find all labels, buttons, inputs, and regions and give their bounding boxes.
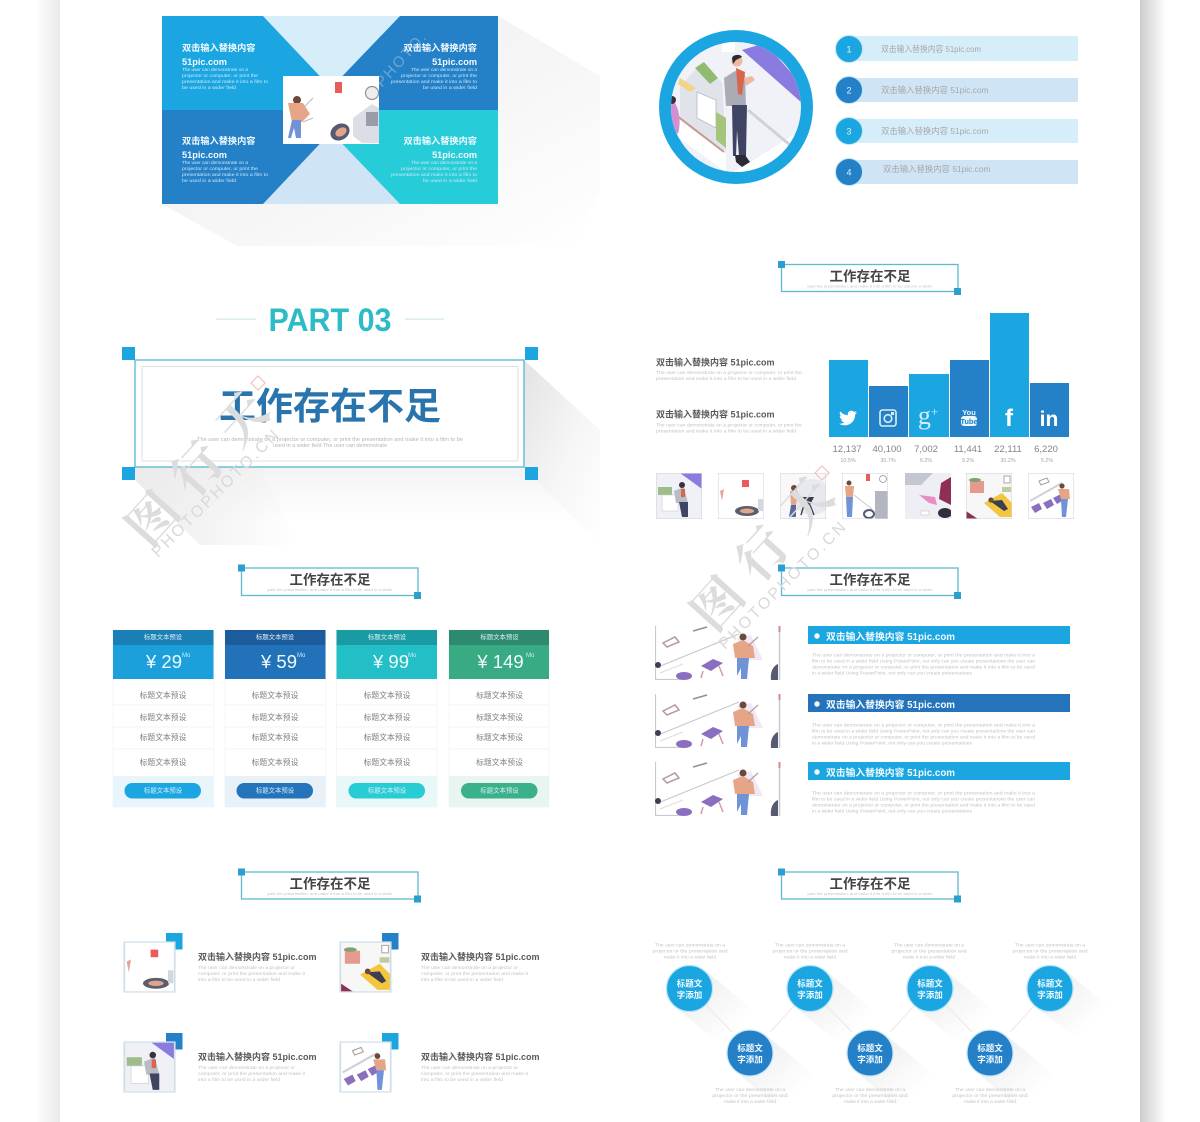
item 2: computer, or print the presentation and make it xyxy=(421,971,529,976)
row 1: demonstrate on a projector or computer, or print the presentation and make it into a film to be used xyxy=(812,664,1035,670)
bar: google plus xyxy=(909,374,949,437)
pricing card 3: 标题文本预设 xyxy=(364,712,411,722)
subtitle xyxy=(197,437,463,449)
main title: 工作存在不足 xyxy=(219,386,441,427)
list row 4: 双击输入替换内容 51pic.com xyxy=(883,164,991,174)
pricing card 1 xyxy=(113,630,214,807)
row 2: 双击输入替换内容 51pic.com xyxy=(826,698,955,711)
text: top left xyxy=(182,42,269,90)
node 5: projector or the presentation and xyxy=(712,1093,788,1098)
node 3: make it into a wider field xyxy=(903,954,955,960)
watermark: left xyxy=(116,376,284,561)
pricing card 3 xyxy=(336,630,437,807)
list row 1: 1 xyxy=(846,44,852,54)
text: top right: presentation and make it into a film to xyxy=(391,79,478,84)
pricing card 4: Mo xyxy=(526,653,535,659)
node 3: 标题文 xyxy=(917,978,943,988)
item 2: into a film to be used in a wider field xyxy=(421,977,503,982)
bar: google plus: + xyxy=(931,404,938,419)
node 4: 字添加 xyxy=(1037,990,1063,1000)
list row 2: 2 xyxy=(846,86,852,96)
list row 1: 双击输入替换内容 51pic.com xyxy=(881,44,981,54)
node 6: projector or the presentation and xyxy=(832,1093,908,1098)
row 2: film to be used in a wider field Using PowerPoint, not only can you create presentations the user can xyxy=(812,728,1035,734)
watermark: right: 图 xyxy=(681,567,756,641)
watermark: right: PHOTOPHOTO.CN xyxy=(716,517,851,653)
item 3: The user can demonstrate on a projector or xyxy=(198,1065,296,1070)
node 1: make it into a wider field xyxy=(664,954,716,960)
watermark: faint on top panel: PHOTO. xyxy=(372,28,431,91)
list row 3: 3 xyxy=(846,126,852,136)
bar: twitter xyxy=(829,360,868,437)
pricing card 3: 标题文本预设 xyxy=(368,632,407,641)
connector lines xyxy=(706,1005,1034,1032)
node 3 xyxy=(892,942,967,1012)
text block 2: The user can demonstrate on a projector or computer, or print the xyxy=(656,422,802,428)
item 2: The user can demonstrate on a projector or xyxy=(421,965,519,970)
PART 03 label: PART 03 xyxy=(268,302,392,338)
watermark: left: 图 xyxy=(116,482,191,556)
node 1: The user can demonstrate on a xyxy=(655,942,725,948)
node 1: 标题文 xyxy=(677,978,703,988)
item 1: into a film to be used in a wider field xyxy=(198,977,280,982)
text: bottom left: presentation and make it into a film to xyxy=(182,172,269,177)
panel: four colour quadrants xyxy=(162,16,600,246)
watermark: left: PHOTOPHOTO.CN xyxy=(149,425,284,561)
node 4: The user can demonstrate on a xyxy=(1015,942,1085,948)
chart values: 22,111 xyxy=(994,444,1022,455)
node 2 xyxy=(772,942,848,1012)
item 4: 双击输入替换内容 51pic.com xyxy=(421,1051,540,1062)
text: bottom left: 51pic.com xyxy=(182,150,227,160)
pricing card 4 xyxy=(449,630,549,807)
row 1: in a wider field Using PowerPoint, not only can you create presentations xyxy=(812,670,973,676)
node 6: The user can demonstrate on a xyxy=(835,1087,905,1092)
pricing card 3: 标题文本预设 xyxy=(364,757,411,767)
node 3: The user can demonstrate on a xyxy=(894,942,964,948)
row 3: 双击输入替换内容 51pic.com xyxy=(826,766,955,779)
node 4: projector or the presentation and xyxy=(1012,948,1088,954)
bar: facebook xyxy=(990,313,1029,437)
row 3: demonstrate on a projector or computer, or print the presentation and make it into a film to be used xyxy=(812,802,1035,808)
subtitle: The user can demonstrate on a projector or computer, or print the presentation and make it into a film to be xyxy=(197,437,463,443)
pricing card 2: 标题文本预设 xyxy=(252,757,299,767)
text block 1: 双击输入替换内容 51pic.com xyxy=(656,356,775,368)
watermark: right xyxy=(681,466,851,653)
text: bottom left xyxy=(182,135,269,183)
item 3: computer, or print the presentation and make it xyxy=(198,1071,306,1076)
heading frame: pricing section: past the presentation, and make it into a film to be used in a wider xyxy=(268,588,393,592)
watermark: left: 行 xyxy=(160,432,235,507)
row 2: in a wider field Using PowerPoint, not only can you create presentations xyxy=(812,740,973,746)
pricing card 4: 标题文本预设 xyxy=(480,786,519,794)
heading frame: bar chart section xyxy=(778,261,961,295)
heading frame: pricing section: 工作存在不足 xyxy=(290,572,371,588)
chart values: 7,002 xyxy=(914,444,938,455)
pricing card 2: 标题文本预设 xyxy=(252,690,299,700)
node 7: The user can demonstrate on a xyxy=(955,1087,1025,1092)
text: top right: projector or computer, or print the xyxy=(401,73,478,78)
row 1: The user can demonstrate on a projector or computer, or print the presentation and make it into a xyxy=(812,652,1035,658)
item 1 xyxy=(124,933,317,992)
node 1: projector or the presentation and xyxy=(652,948,728,954)
node 4 xyxy=(1012,942,1088,1012)
node 7: make it into a wider field xyxy=(964,1099,1016,1104)
heading frame: timeline section: 工作存在不足 xyxy=(830,876,911,892)
node 5: 字添加 xyxy=(737,1054,763,1064)
panel: three illustrated rows xyxy=(655,626,1070,816)
item 3 xyxy=(124,1033,317,1092)
pricing card 2: Mo xyxy=(297,653,306,659)
node 5 xyxy=(712,1030,788,1104)
node 1: 字添加 xyxy=(677,990,702,1000)
node 6: 标题文 xyxy=(857,1043,883,1053)
pricing card 4: 标题文本预设 xyxy=(480,632,519,641)
text: top left: 51pic.com xyxy=(182,57,227,67)
pricing card 2: 标题文本预设 xyxy=(256,632,295,641)
row 1 xyxy=(655,626,1070,680)
illustration: man in circle xyxy=(659,30,813,184)
long shadow xyxy=(162,16,600,246)
node 4: make it into a wider field xyxy=(1024,954,1076,960)
pricing card 4: ¥ 149 xyxy=(476,651,524,672)
pricing card 3: Mo xyxy=(408,653,417,659)
chart values: 5.2% xyxy=(1041,458,1053,464)
row 1: 双击输入替换内容 51pic.com xyxy=(826,630,955,643)
chart values: 30.2% xyxy=(1000,458,1016,464)
bar: youtube xyxy=(950,360,989,437)
node 6 xyxy=(832,1030,908,1104)
text: bottom left: be used in a wider field xyxy=(182,178,237,183)
item 4: The user can demonstrate on a projector or xyxy=(421,1065,519,1070)
text: bottom left: The user can demonstrate on a xyxy=(182,160,249,165)
text block 1 xyxy=(656,356,802,381)
pricing card 2: 标题文本预设 xyxy=(252,732,299,742)
item 1: 双击输入替换内容 51pic.com xyxy=(198,951,317,962)
node 5: make it into a wider field xyxy=(724,1099,776,1104)
illustration: centre photo xyxy=(283,76,379,144)
node 6: 字添加 xyxy=(857,1054,883,1064)
chart values: 9.2% xyxy=(962,458,974,464)
heading frame: timeline section xyxy=(778,868,961,902)
panel: image grid with captions xyxy=(124,933,540,1092)
heading frame: meeting rows section: 工作存在不足 xyxy=(830,572,911,588)
list row 2: 双击输入替换内容 51pic.com xyxy=(881,85,989,95)
text block 2: presentation and make it into a film to be used in a wider field xyxy=(656,428,796,434)
subtitle: used in a wider field The user can demonstrate xyxy=(273,443,387,449)
chart values: 6,220 xyxy=(1034,444,1058,455)
bar: youtube: You xyxy=(962,408,976,417)
pricing card 2: ¥ 59 xyxy=(260,651,297,672)
node 5: The user can demonstrate on a xyxy=(715,1087,785,1092)
pricing card 2 xyxy=(225,630,326,807)
pricing card 3: 标题文本预设 xyxy=(364,732,411,742)
node 4: 标题文 xyxy=(1037,978,1063,988)
text: top left: presentation and make it into a film to xyxy=(182,79,269,84)
pricing card 4: 标题文本预设 xyxy=(476,712,523,722)
node 1 xyxy=(652,942,728,1012)
pricing card 4: 标题文本预设 xyxy=(476,732,523,742)
chart values: 6.2% xyxy=(920,458,932,464)
pricing card 1: Mo xyxy=(182,653,191,659)
node 3: projector or the presentation and xyxy=(892,948,967,954)
chart values: 12,137 xyxy=(832,444,862,455)
chart values xyxy=(832,444,1058,464)
list row 2 xyxy=(836,76,1078,104)
text: bottom right: projector or computer, or print the xyxy=(401,166,478,171)
pricing card 1: ¥ 29 xyxy=(145,651,182,672)
list row 4 xyxy=(836,158,1078,186)
node 2: projector or the presentation and xyxy=(772,948,848,954)
text: bottom right xyxy=(391,135,478,183)
node 2: 字添加 xyxy=(797,990,823,1000)
row 2: demonstrate on a projector or computer, or print the presentation and make it into a film to be used xyxy=(812,734,1035,740)
text: top left: projector or computer, or print the xyxy=(182,73,259,78)
list row 3 xyxy=(836,118,1078,144)
long shadow xyxy=(135,360,600,545)
pricing card 3: 标题文本预设 xyxy=(364,690,411,700)
pricing card 1: 标题文本预设 xyxy=(140,690,187,700)
pricing card 4: 标题文本预设 xyxy=(476,757,523,767)
watermark: right: 行 xyxy=(725,517,800,592)
heading frame: pricing section xyxy=(238,564,421,599)
pricing card 3: 标题文本预设 xyxy=(368,786,407,794)
text: top left: be used in a wider field xyxy=(182,85,237,90)
list row 3: 双击输入替换内容 51pic.com xyxy=(881,126,989,136)
pricing card 1: 标题文本预设 xyxy=(144,786,183,794)
pricing card 2: 标题文本预设 xyxy=(252,712,299,722)
bar: facebook: f xyxy=(1005,405,1014,432)
chart values: 40,100 xyxy=(872,444,902,455)
long shadows xyxy=(673,971,1115,1116)
pricing card 1: 标题文本预设 xyxy=(140,732,187,742)
text: top right: be used in a wider field xyxy=(423,85,478,90)
row 3 xyxy=(655,762,1070,816)
item 3: into a film to be used in a wider field xyxy=(198,1077,280,1082)
bar: youtube: Tube xyxy=(960,417,978,426)
item 1: computer, or print the presentation and make it xyxy=(198,971,306,976)
panel: zigzag circle timeline xyxy=(652,942,1115,1116)
text: top right: 双击输入替换内容 xyxy=(404,42,477,53)
text: bottom left: 双击输入替换内容 xyxy=(182,135,256,146)
bar: instagram xyxy=(869,386,908,437)
row 3: The user can demonstrate on a projector or computer, or print the presentation and make it into a xyxy=(812,790,1035,796)
pricing card 1: 标题文本预设 xyxy=(144,632,183,641)
text: top right: The user can demonstrate on a xyxy=(411,67,478,72)
item 2 xyxy=(340,933,540,992)
pricing card 3: ¥ 99 xyxy=(372,651,409,672)
bar: linkedin: in xyxy=(1040,408,1058,431)
text: top left: The user can demonstrate on a xyxy=(182,67,249,72)
text block 2: 双击输入替换内容 51pic.com xyxy=(656,408,775,420)
text: top right: 51pic.com xyxy=(432,57,477,67)
panel: PART 03 section title xyxy=(122,302,600,545)
list row 1 xyxy=(836,36,1078,62)
item 2: 双击输入替换内容 51pic.com xyxy=(421,951,540,962)
row 2: The user can demonstrate on a projector or computer, or print the presentation and make it into a xyxy=(812,722,1035,728)
bar: google plus: g xyxy=(918,401,931,430)
heading frame: meeting rows section: past the presentation, and make it into a film to be used in a wider xyxy=(808,588,933,592)
node 2: make it into a wider field xyxy=(784,954,836,960)
pricing card 4: 标题文本预设 xyxy=(476,690,523,700)
panel: pricing tables xyxy=(113,630,549,807)
pricing card 2: 标题文本预设 xyxy=(256,786,295,794)
node 7: 字添加 xyxy=(977,1054,1003,1064)
text block 1: The user can demonstrate on a projector or computer, or print the xyxy=(656,370,802,375)
heading frame: image grid section: 工作存在不足 xyxy=(290,876,371,892)
heading frame: timeline section: past the presentation, and make it into a film to be used in a wider xyxy=(808,892,933,896)
heading frame: bar chart section: 工作存在不足 xyxy=(830,268,911,284)
watermark: left: 天 xyxy=(205,382,280,457)
row 3: film to be used in a wider field Using PowerPoint, not only can you create presentations the user can xyxy=(812,796,1035,802)
node 7 xyxy=(952,1030,1028,1104)
heading frame: image grid section: past the presentation, and make it into a film to be used in a wider xyxy=(268,892,393,896)
item 3: 双击输入替换内容 51pic.com xyxy=(198,1051,317,1062)
chart values: 30.7% xyxy=(880,458,896,464)
list row 4: 4 xyxy=(846,168,852,178)
heading frame: bar chart section: past the presentation, and make it into a film to be used in a wider xyxy=(808,284,933,288)
node 2: The user can demonstrate on a xyxy=(775,942,845,948)
node 2: 标题文 xyxy=(797,978,823,988)
row 2 xyxy=(655,694,1070,748)
text: bottom right: 51pic.com xyxy=(432,150,477,160)
text: bottom right: The user can demonstrate on a xyxy=(411,160,478,165)
chart values: 10.5% xyxy=(840,458,856,464)
text: top left: 双击输入替换内容 xyxy=(182,42,256,53)
chart values: 11,441 xyxy=(954,444,982,455)
pricing card 1: 标题文本预设 xyxy=(140,757,187,767)
text: bottom left: projector or computer, or print the xyxy=(182,166,259,171)
quadrant backgrounds xyxy=(162,16,498,204)
text: bottom right: presentation and make it into a film to xyxy=(391,172,478,177)
text block 2 xyxy=(656,408,802,434)
title frame xyxy=(122,347,538,480)
watermark: right: 天 xyxy=(770,467,845,542)
bar: linkedin xyxy=(1030,383,1069,437)
row 1: film to be used in a wider field Using PowerPoint, not only can you create presentations the user can xyxy=(812,658,1035,664)
node 5: 标题文 xyxy=(737,1043,763,1053)
thumbnail row xyxy=(656,473,1074,519)
node 3: 字添加 xyxy=(917,990,943,1000)
heading frame: meeting rows section xyxy=(778,564,961,599)
text: bottom right: 双击输入替换内容 xyxy=(404,135,477,146)
heading frame: image grid section xyxy=(238,868,421,902)
panel: social media bar chart xyxy=(656,313,1074,519)
node 7: projector or the presentation and xyxy=(952,1093,1028,1098)
item 4 xyxy=(340,1033,540,1092)
item 4: computer, or print the presentation and make it xyxy=(421,1071,529,1076)
node 6: make it into a wider field xyxy=(844,1099,896,1104)
panel: circular photo with numbered list xyxy=(659,30,1078,186)
item 4: into a film to be used in a wider field xyxy=(421,1077,503,1082)
text: bottom right: be used in a wider field xyxy=(423,178,478,183)
node 7: 标题文 xyxy=(977,1043,1003,1053)
item 1: The user can demonstrate on a projector or xyxy=(198,965,296,970)
text: top right xyxy=(391,42,478,90)
text block 1: presentation and make it into a film to be used in a wider field xyxy=(656,376,796,381)
row 3: in a wider field Using PowerPoint, not only can you create presentations xyxy=(812,808,973,814)
pricing card 1: 标题文本预设 xyxy=(140,712,187,722)
